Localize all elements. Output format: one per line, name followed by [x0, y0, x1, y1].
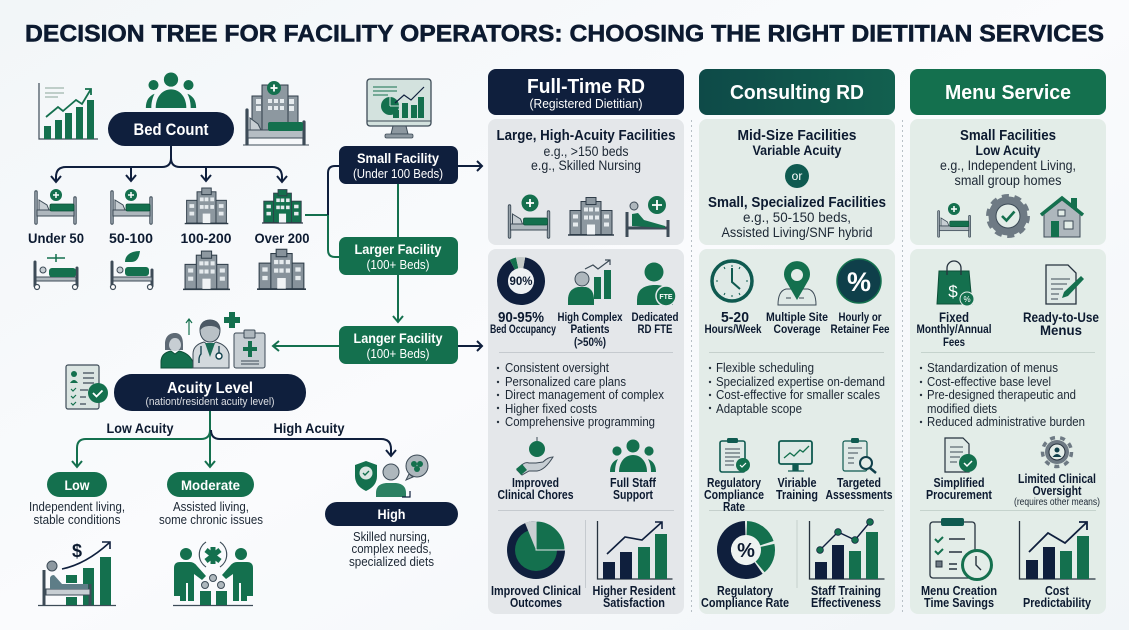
label: regulatory compliance rate [701, 584, 789, 610]
icon: cost with patient bed: $ [72, 541, 82, 561]
node: moderate: Moderate [181, 477, 240, 493]
icon: percent: % [847, 267, 871, 297]
label: variable training: Training [776, 488, 818, 502]
profile text: Assisted Living/SNF hybrid [722, 225, 872, 240]
profile text: Small, Specialized Facilities [708, 195, 886, 211]
option: 50-100 [109, 189, 153, 246]
label: regulatory compliance rate: Compliance Rate [701, 596, 789, 610]
node: langer facility: (100+ Beds) [366, 347, 430, 361]
column: Full-Time RD [488, 69, 684, 614]
label: regulatory compliance rate: Compliance [704, 488, 764, 502]
label: higher resident satisfaction [592, 584, 676, 610]
metric: occupancy text [490, 310, 556, 336]
metric: ready to use: Ready-to-Use [1023, 310, 1099, 325]
arrows: acuity branches [72, 411, 396, 467]
icon: bed with pillow [110, 251, 152, 290]
bullet list: Cost-effective base level [927, 374, 1051, 389]
icon: large hospital gray [257, 249, 306, 289]
node: moderate [167, 472, 254, 497]
metric: fee: Hourly or [838, 312, 882, 324]
icon: people group [146, 72, 196, 108]
icon: care team [161, 312, 265, 368]
profile text: e.g., Skilled Nursing [531, 158, 641, 173]
label: menu creation time savings: Menu Creation [921, 584, 997, 598]
icon: hospital [568, 198, 614, 235]
node: small facility: (Under 100 Beds) [353, 167, 443, 181]
donut: bed occupancy: 90% [509, 276, 533, 288]
profile text [940, 128, 1076, 188]
bullet list [709, 360, 885, 416]
arrows: bed count branches [51, 146, 287, 182]
metric: fee [830, 312, 890, 336]
icon: hand with apple [516, 437, 553, 475]
label: staff training effectiveness: Effectiveness [811, 596, 881, 610]
donut chart: regulatory compliance: % [737, 540, 755, 562]
node: low [47, 472, 107, 497]
label: staff training effectiveness: Staff Training [811, 584, 881, 598]
label: higher resident satisfaction: Satisfaction [603, 596, 665, 610]
label: cost predictability: Predictability [1023, 596, 1091, 610]
bar chart: staff training [810, 519, 884, 579]
bullet list: Flexible scheduling [716, 360, 814, 375]
bullet list: Cost-effective for smaller scales [716, 387, 880, 402]
label: limited clinical oversight [1014, 472, 1100, 508]
text: low description: Independent living, [29, 500, 125, 514]
node: larger facility [339, 237, 458, 275]
label: targeted assessments [826, 476, 893, 502]
node: Bed Count: Bed Count [134, 120, 209, 139]
label: low acuity: Low Acuity [106, 421, 174, 436]
panel: details [488, 249, 684, 614]
icon: checklist with clock [930, 518, 992, 580]
icon: gear check [988, 196, 1028, 236]
pie chart: clinical outcomes [507, 521, 565, 579]
text: moderate description: some chronic issues [159, 513, 263, 527]
header: Full-Time RD: Full-Time RD [527, 76, 645, 98]
option: under 50 [28, 189, 84, 246]
metric: fixed fees [916, 310, 992, 349]
donut chart: regulatory compliance [724, 528, 768, 572]
label: full staff support: Support [613, 488, 654, 502]
icon: high acuity clinician [355, 455, 428, 497]
node: high [325, 502, 458, 526]
icon: assessment magnifier [843, 438, 876, 473]
option: over 200 [254, 190, 310, 246]
node: high: High [378, 506, 406, 522]
icon: procurement document [945, 438, 977, 472]
metric: occupancy text: 90-95% [498, 310, 544, 326]
bar chart: cost predictability [1020, 521, 1096, 579]
bullet list: Consistent oversight [505, 360, 609, 375]
bullet list: Comprehensive programming [505, 414, 655, 429]
node: low: Low [64, 477, 90, 493]
bullet list: Reduced administrative burden [927, 414, 1085, 429]
profile text: e.g., 50-150 beds, [743, 210, 851, 225]
label: full staff support [610, 476, 657, 502]
label: cost predictability: Cost [1045, 584, 1070, 598]
icon: hospital and bed [243, 81, 309, 145]
label: improved clinical chores: Improved [512, 476, 559, 490]
label: targeted assessments: Assessments [826, 488, 893, 502]
label: regulatory compliance rate [704, 476, 764, 514]
icon: oversight gear [1042, 438, 1072, 466]
metric: occupancy text: Bed Occupancy [490, 324, 556, 336]
bullet list: Pre-designed therapeutic and [927, 387, 1076, 402]
panel: facility profile [699, 119, 895, 245]
icon: bed [510, 194, 548, 237]
icon: document pen [1046, 265, 1084, 304]
connector: to facility size [305, 166, 339, 257]
metric: multiple site: Coverage [774, 324, 820, 336]
metric: dedicated text: RD FTE [638, 324, 673, 336]
bullet list: modified diets [927, 401, 997, 416]
node: small facility [339, 146, 458, 184]
node: langer facility [339, 326, 458, 364]
profile text: e.g., Independent Living, [940, 158, 1076, 173]
metric: fixed fees: Fixed [939, 310, 969, 325]
metric: fee: Retainer Fee [830, 324, 890, 336]
node: larger facility: (100+ Beds) [366, 258, 430, 272]
flow line: facility nodes [393, 184, 403, 322]
icon: hospital bed with wheels [34, 254, 78, 290]
title: DECISION TREE FOR FACILITY OPERATORS: CHOOSING THE RIGHT DIETITIAN SERVICES [25, 20, 1104, 48]
bullet list: Standardization of menus [927, 360, 1058, 375]
node: small facility: Small Facility [357, 150, 439, 166]
donut: bed occupancy [503, 263, 540, 300]
text: low description: stable conditions [34, 513, 120, 527]
label: improved clinical outcomes: Improved Clinical [491, 584, 581, 598]
label: limited clinical oversight: Oversight [1032, 484, 1082, 498]
text: low description [29, 500, 125, 527]
metric: multiple site [766, 312, 828, 336]
panel: facility profile [910, 119, 1106, 245]
option: over 200: Over 200 [254, 230, 310, 246]
option: under 50: Under 50 [28, 230, 84, 246]
profile text: Low Acuity [976, 143, 1041, 158]
header: Full-Time RD [488, 69, 684, 115]
profile text: small group homes [954, 173, 1062, 188]
label: simplified procurement: Procurement [926, 488, 993, 502]
node: langer facility: Langer Facility [354, 330, 443, 346]
profile text: Small Facilities [960, 128, 1056, 144]
icon: fee bag: $ [948, 282, 958, 301]
option: 50-100: 50-100 [109, 230, 153, 246]
icon: hospital gray [183, 251, 230, 289]
icon: staff group [610, 440, 656, 472]
icon: complex patient chart [568, 260, 611, 305]
column: Consulting RD [699, 69, 1008, 614]
label: menu creation time savings: Time Savings [924, 596, 994, 610]
metric: complex patients text: (>50%) [574, 337, 606, 349]
metric: dedicated text: Dedicated [632, 312, 678, 324]
icon: bed [939, 203, 970, 236]
metric: hours per week: 5-20 [721, 310, 749, 326]
header: Consulting RD: Consulting RD [730, 82, 864, 104]
profile text: Mid-Size Facilities [738, 128, 856, 144]
icon: dedicated person FTE [637, 262, 676, 306]
header: Menu Service: Menu Service [945, 82, 1071, 104]
icon: family and caregivers [173, 542, 253, 606]
label: regulatory compliance rate: Regulatory [717, 584, 773, 598]
text: high description: complex needs, [352, 542, 432, 556]
node: acuity level [114, 374, 306, 411]
metric: complex patients text [558, 312, 623, 349]
text: moderate description: Assisted living, [173, 500, 249, 514]
label: simplified procurement: Simplified [934, 476, 984, 490]
metric: hours per week [704, 310, 762, 336]
bullet list: Specialized expertise on-demand [716, 374, 885, 389]
node: acuity level: (nationt/resident acuity level) [146, 396, 274, 408]
badge: or [785, 164, 809, 188]
label: staff training effectiveness [811, 584, 881, 610]
icon: fee bag: % [963, 295, 971, 304]
bullet list [920, 360, 1085, 429]
icon: location pin [778, 261, 816, 305]
text: high description: specialized diets [349, 555, 434, 569]
arrow: langer facility to columns [458, 341, 482, 351]
icon: clock [712, 261, 752, 301]
icon: resting patient [627, 196, 668, 237]
label: targeted assessments: Targeted [837, 476, 881, 490]
label: simplified procurement [926, 476, 993, 502]
metric: complex patients text: Patients [570, 324, 610, 336]
label: improved clinical outcomes: Outcomes [510, 596, 562, 610]
label: high acuity: High Acuity [274, 421, 345, 436]
bullet list: Adaptable scope [716, 401, 802, 416]
node: Bed Count [108, 112, 234, 146]
metric: hours per week: Hours/Week [704, 324, 762, 336]
text: moderate description [159, 500, 263, 527]
label: limited clinical oversight: (requires other means) [1014, 497, 1100, 508]
label: improved clinical outcomes [491, 584, 581, 610]
label: improved clinical chores [498, 476, 574, 502]
dotted separators [692, 120, 902, 614]
profile text [708, 128, 886, 240]
panel: details [699, 249, 895, 614]
metric: ready to use: Menus [1040, 323, 1082, 338]
panel: facility profile [488, 119, 684, 245]
header: Full-Time RD: (Registered Dietitian) [530, 97, 642, 111]
label: limited clinical oversight: Limited Clinical [1018, 472, 1096, 486]
label: regulatory compliance rate: Rate [723, 500, 745, 514]
profile text: Large, High-Acuity Facilities [496, 128, 676, 144]
profile text [496, 128, 676, 173]
profile text: e.g., >150 beds [544, 144, 629, 159]
icon: growth chart [39, 83, 98, 139]
icon: training monitor [779, 441, 812, 471]
icon: fee bag [937, 261, 974, 306]
icon: acuity checklist [66, 365, 108, 409]
metric: dedicated text [632, 312, 678, 336]
icon: dedicated person FTE: FTE [659, 294, 673, 301]
bar chart: resident satisfaction [598, 521, 672, 579]
icon: house [1041, 198, 1083, 237]
icon: percent [837, 259, 881, 303]
label: variable training: Viriable [778, 476, 817, 490]
panel: details [910, 249, 1106, 614]
label: full staff support: Full Staff [610, 476, 657, 490]
metric: ready to use [1023, 310, 1099, 338]
profile text: Variable Acuity [752, 143, 842, 158]
option: 100-200 [180, 188, 232, 246]
metric: complex patients text: High Complex [558, 312, 623, 324]
label: higher resident satisfaction: Higher Resident [592, 584, 676, 598]
metric: fixed fees: Fees [943, 337, 965, 349]
node: larger facility: Larger Facility [354, 241, 442, 257]
icon: cost with patient bed [38, 541, 116, 606]
label: variable training [776, 476, 818, 502]
label: improved clinical chores: Clinical Chores [498, 488, 574, 502]
metric: fixed fees: Monthly/Annual [916, 324, 992, 336]
header: Menu Service [910, 69, 1106, 115]
label: cost predictability [1023, 584, 1091, 610]
bullet list: Personalized care plans [505, 374, 626, 389]
column: Menu Service [910, 69, 1106, 614]
header: Consulting RD [699, 69, 895, 115]
badge: or: or [792, 169, 802, 183]
label: menu creation time savings [921, 584, 997, 610]
bullet list [497, 360, 665, 429]
bullet list: Higher fixed costs [505, 401, 597, 416]
metric: multiple site: Multiple Site [766, 312, 828, 324]
node: acuity level: Acuity Level [167, 380, 253, 397]
option: 100-200: 100-200 [180, 230, 232, 246]
label: regulatory compliance rate: Regulatory [707, 476, 761, 490]
text: high description [349, 530, 434, 569]
arrow: small facility to full-time column [458, 161, 482, 171]
bullet list: Direct management of complex [505, 387, 665, 402]
icon: dashboard monitor [367, 79, 431, 138]
arrow: langer facility to acuity [273, 341, 339, 351]
text: high description: Skilled nursing, [353, 530, 430, 544]
icon: compliance clipboard [720, 438, 750, 472]
